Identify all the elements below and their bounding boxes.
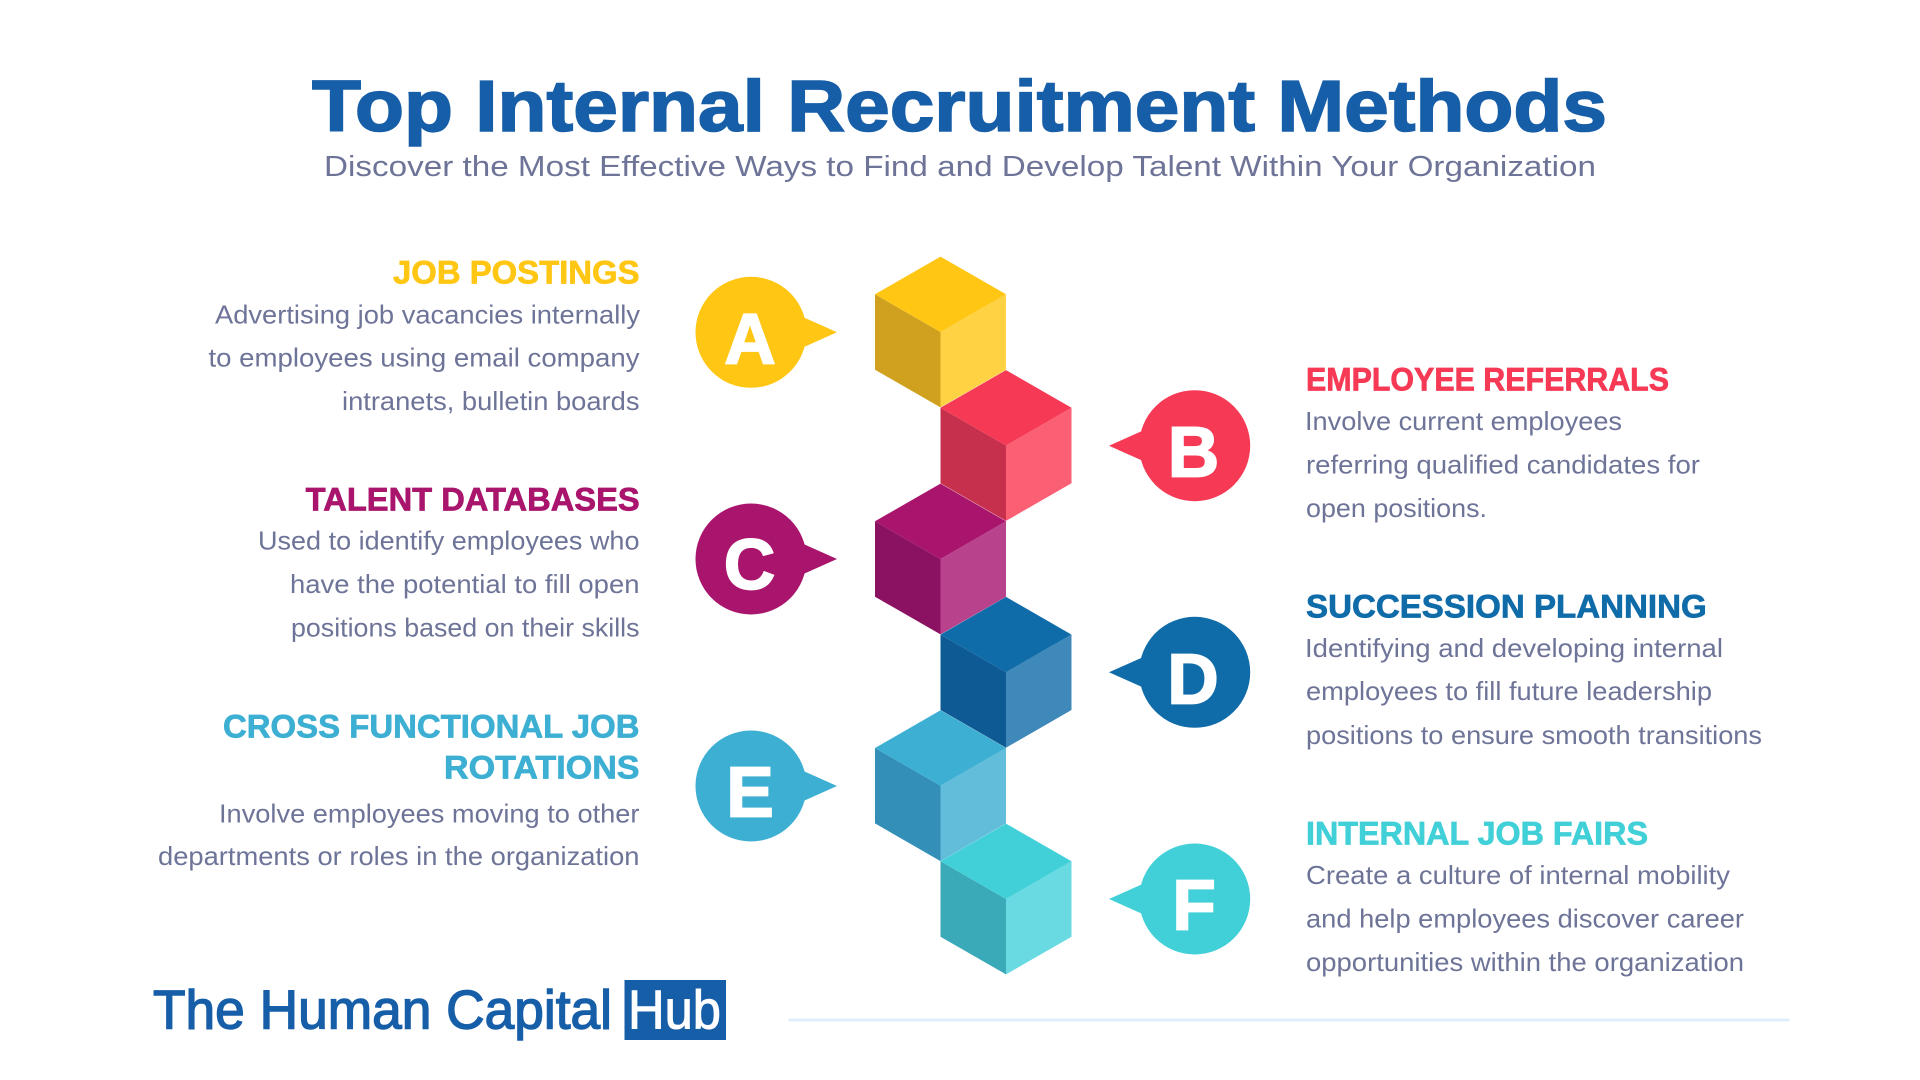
- badge C: [696, 504, 837, 614]
- cube E: [875, 710, 1006, 861]
- description: talent databases: Used to identify employees who: [258, 526, 640, 556]
- heading: employee referrals: EMPLOYEE REFERRALS: [1306, 362, 1669, 398]
- description: cross functional job rotations: departments or roles in the organization: [158, 841, 640, 871]
- badge F: [1109, 844, 1250, 954]
- badge A: A: [724, 300, 776, 380]
- description: internal job fairs: and help employees discover career: [1306, 903, 1744, 933]
- text block: talent databases: [258, 482, 640, 642]
- description: succession planning: employees to fill future leadership: [1306, 676, 1712, 706]
- heading: talent databases: TALENT DATABASES: [306, 482, 640, 518]
- description: talent databases: have the potential to fill open: [290, 569, 640, 599]
- badge B: B: [1168, 414, 1219, 492]
- description: job postings: Advertising job vacancies internally: [215, 299, 640, 329]
- text block: succession planning: [1305, 588, 1762, 750]
- heading: cross functional job rotations: [223, 708, 640, 786]
- badge A: [696, 277, 837, 388]
- badge E: [696, 730, 837, 842]
- description: employee referrals: open positions.: [1306, 493, 1487, 523]
- subtitle: Discover the Most Effective Ways to Find and Develop Talent Within Your Organization: [324, 151, 1596, 183]
- badge D: [1109, 617, 1250, 728]
- description: employee referrals: referring qualified candidates for: [1306, 449, 1700, 479]
- text block: job postings: [208, 254, 640, 416]
- cube A: [875, 257, 1006, 407]
- description: succession planning: [1305, 633, 1762, 750]
- cube F: [940, 824, 1072, 974]
- description: employee referrals: [1305, 406, 1700, 523]
- cube D: [940, 597, 1072, 748]
- description: job postings: [208, 299, 640, 416]
- description: cross functional job rotations: [158, 798, 640, 871]
- heading: job postings: JOB POSTINGS: [393, 254, 640, 290]
- description: succession planning: positions to ensure smooth transitions: [1306, 720, 1762, 750]
- cube C: [875, 484, 1006, 634]
- description: employee referrals: Involve current employees: [1305, 406, 1622, 436]
- description: cross functional job rotations: Involve employees moving to other: [219, 798, 640, 828]
- description: internal job fairs: Create a culture of internal mobility: [1306, 860, 1730, 890]
- logo: The Human Capital Hub: Hub: [628, 978, 721, 1040]
- description: succession planning: Identifying and developing internal: [1305, 633, 1723, 663]
- description: internal job fairs: opportunities within the organization: [1306, 947, 1744, 977]
- logo: The Human Capital Hub: The Human Capital: [153, 978, 612, 1040]
- description: internal job fairs: [1306, 860, 1744, 977]
- text block: internal job fairs: [1306, 816, 1744, 977]
- heading: internal job fairs: INTERNAL JOB FAIRS: [1306, 816, 1648, 852]
- text block: employee referrals: [1305, 362, 1700, 523]
- badge E: E: [726, 754, 774, 832]
- title: Top Internal Recruitment Methods: [312, 67, 1607, 147]
- heading: cross functional job rotations: ROTATIONS: [444, 750, 640, 786]
- description: talent databases: positions based on their skills: [291, 612, 640, 642]
- heading: succession planning: SUCCESSION PLANNING: [1306, 588, 1707, 624]
- badge D: D: [1167, 640, 1219, 720]
- isometric cube stack: [875, 257, 1072, 974]
- badge F: F: [1172, 866, 1216, 946]
- description: talent databases: [258, 526, 640, 642]
- text block: cross functional job rotations: [158, 708, 640, 871]
- badge B: [1109, 390, 1250, 501]
- heading: cross functional job rotations: CROSS FUNCTIONAL JOB: [223, 708, 640, 744]
- cube B: [940, 370, 1072, 521]
- description: job postings: intranets, bulletin boards: [342, 386, 640, 416]
- badge C: C: [724, 526, 775, 605]
- description: job postings: to employees using email company: [208, 342, 640, 372]
